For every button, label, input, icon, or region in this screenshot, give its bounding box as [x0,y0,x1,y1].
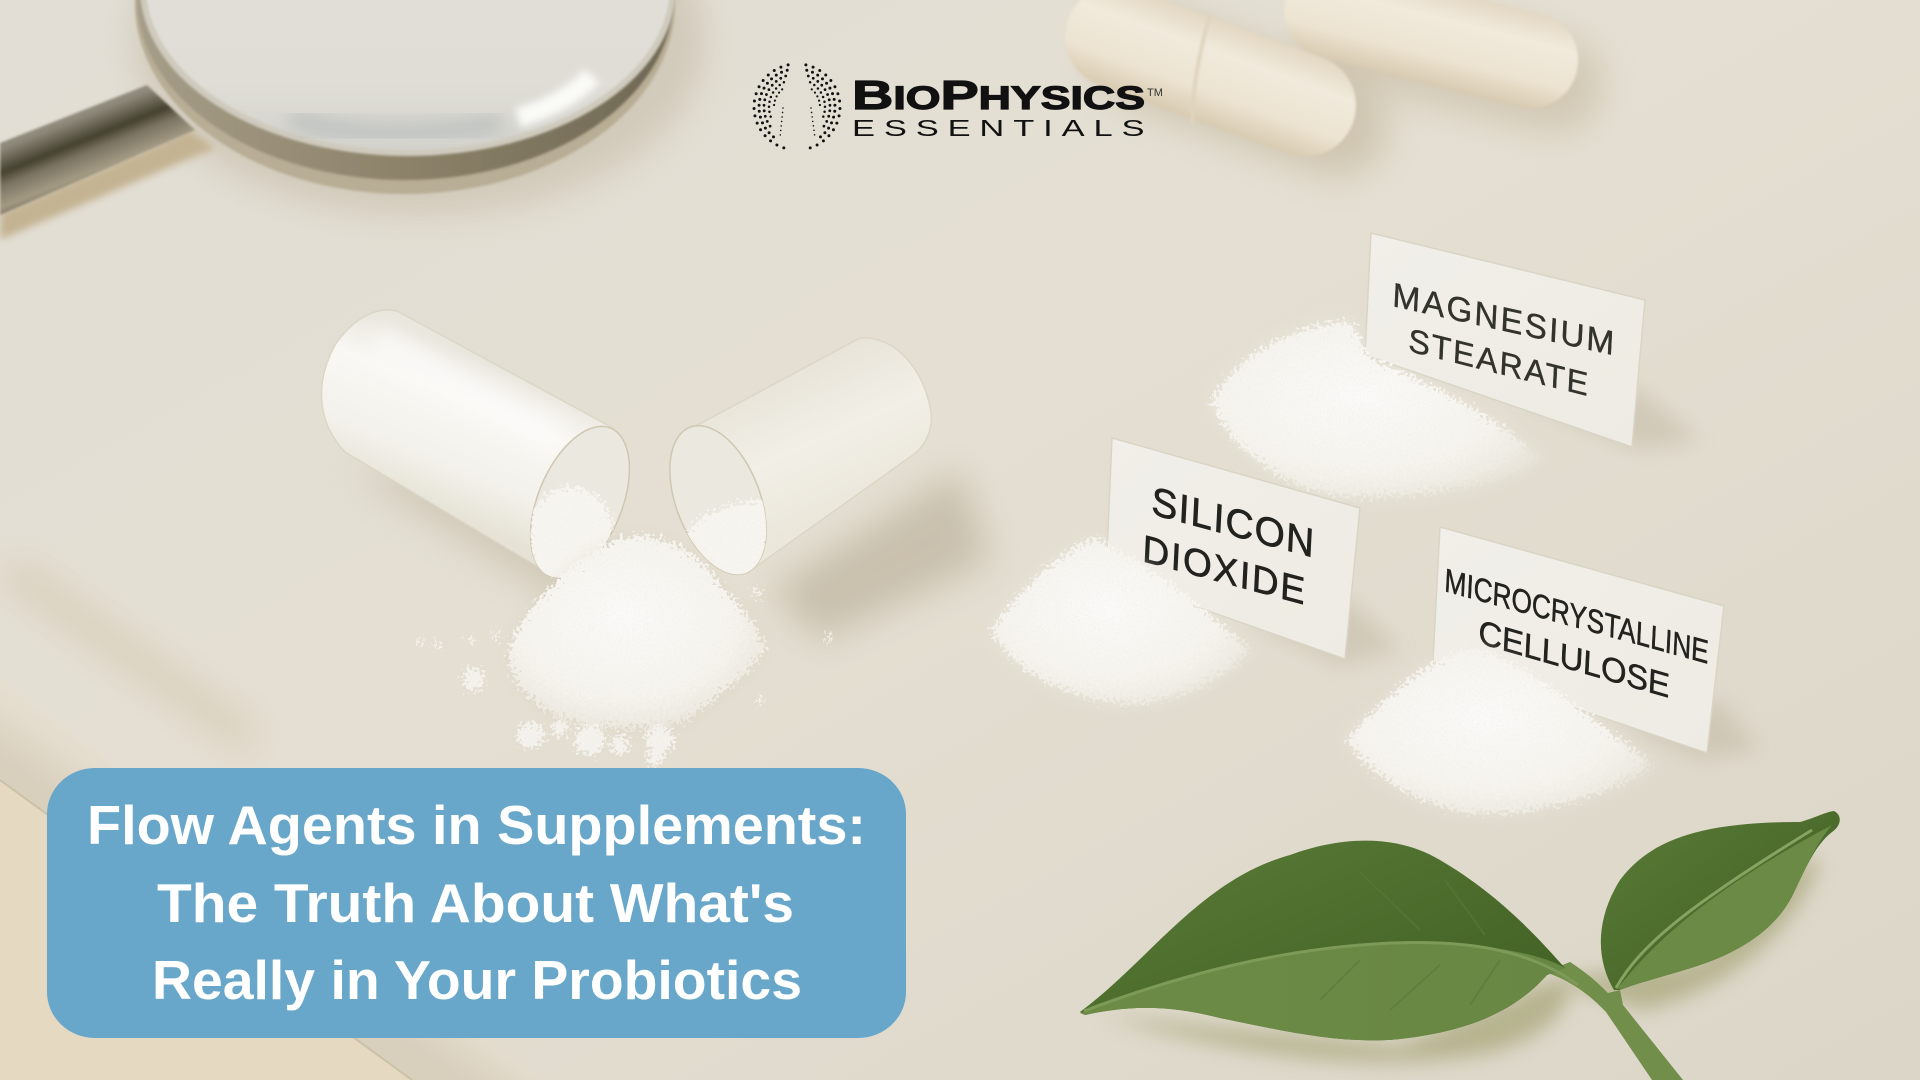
trademark: TM [1147,87,1163,99]
capsule: left [1051,0,1370,171]
card label: MAGNESIUM [1392,276,1615,363]
stem [1545,962,1683,1080]
small leaf [1601,811,1840,990]
ingredient card: magnesium stearate: STEARATE [1408,321,1589,403]
powder pile: magnesium stearate [1212,322,1540,497]
lens [146,0,670,150]
ingredient card: silicon dioxide [1106,438,1400,665]
card label: MICROCRYSTALLINE [1444,561,1710,671]
capsule shadows [350,470,650,610]
logo: BioPhysics Essentials [754,65,1163,148]
title text [87,794,866,1011]
wordmark: B IO P HYSICS [852,72,1145,118]
ingredient card: silicon dioxide: DIOXIDE [1142,528,1306,614]
wood table and slab edge [0,682,540,1080]
title text: The Truth About What's [157,872,794,934]
ingredient card: magnesium stearate [1365,233,1700,450]
handle [0,85,195,215]
icon: dotted human figure [754,65,840,148]
large leaf [1080,841,1565,1040]
ingredient card: microcrystalline cellulose: CELLULOSE [1478,613,1671,706]
tagline: ESSENTIALS [852,116,1144,141]
ingredient card: microcrystalline cellulose [1433,527,1760,760]
top capsules [1051,0,1612,189]
title panel [47,768,906,1038]
powder pile: silicon dioxide [992,539,1250,704]
powder pile [508,536,765,728]
magnifying glass [0,0,705,240]
powder clumps [418,589,831,766]
capsule: right [1274,0,1588,118]
capsule half: right [669,337,932,575]
title text: Flow Agents in Supplements: [87,794,866,856]
capsule half: left [321,310,630,578]
card label: SILICON [1151,479,1315,567]
leaf shadow [1100,860,1820,1062]
handle reflection [0,130,215,240]
title text: Really in Your Probiotics [152,949,802,1011]
powder pile: microcrystalline cellulose [1347,649,1653,814]
rim [135,0,675,194]
open capsule and spilled powder [321,310,990,766]
green leaves [1080,811,1840,1080]
